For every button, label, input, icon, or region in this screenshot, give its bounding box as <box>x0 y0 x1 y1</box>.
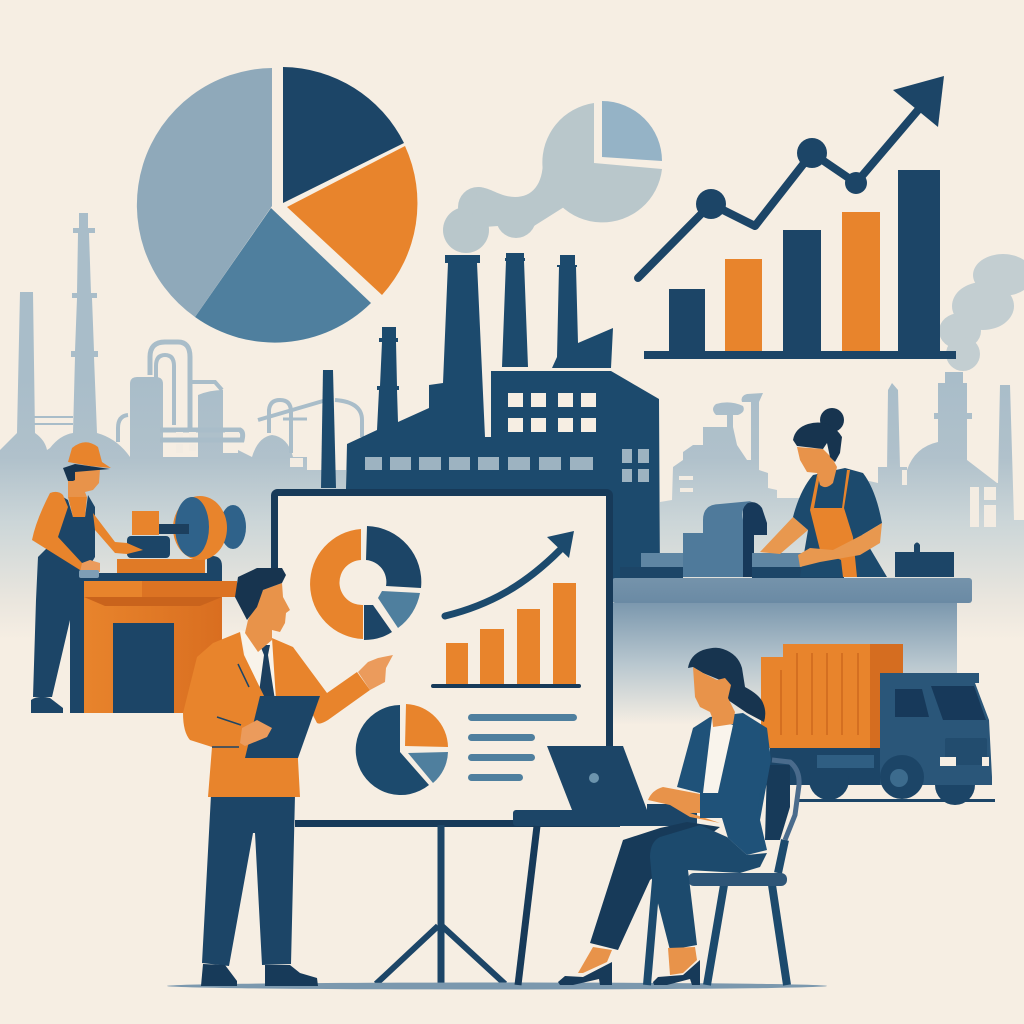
pointing hand <box>358 655 393 690</box>
tablet <box>245 696 320 758</box>
shirt center <box>68 497 87 517</box>
jacket <box>183 632 370 797</box>
holding hand <box>240 720 272 746</box>
face <box>693 667 735 727</box>
head <box>797 447 837 487</box>
presentation board <box>271 492 620 985</box>
left worker <box>31 442 246 713</box>
right arm <box>93 513 143 554</box>
shoes <box>201 964 237 986</box>
small pie chart with smoke <box>443 101 662 253</box>
hair <box>235 568 286 620</box>
right skyline <box>660 372 1024 640</box>
legs and overalls <box>33 492 95 713</box>
laptop <box>547 746 692 810</box>
torso <box>793 468 887 577</box>
smoke <box>443 160 572 253</box>
trousers <box>202 795 295 966</box>
main slice <box>542 103 662 222</box>
board stand <box>376 825 505 985</box>
bar and line chart <box>638 76 956 359</box>
desk <box>513 810 697 985</box>
jacket seams <box>212 664 249 747</box>
head <box>68 469 100 497</box>
left arm <box>32 492 82 570</box>
left arm <box>760 517 808 554</box>
donut chart <box>310 526 421 640</box>
floor shadow <box>167 982 827 990</box>
right smoke <box>939 254 1024 371</box>
shoes <box>578 947 612 973</box>
trend line <box>638 76 944 278</box>
board text lines <box>468 714 577 781</box>
cargo ribs <box>781 653 858 735</box>
shirt <box>703 718 733 793</box>
truck <box>761 644 995 805</box>
chair <box>647 760 799 985</box>
front leg <box>650 825 767 950</box>
counter <box>612 578 972 725</box>
hands <box>648 787 720 823</box>
board small pie <box>356 704 448 795</box>
apron <box>810 470 857 577</box>
blazer sleeve <box>700 793 760 818</box>
light slice <box>602 101 662 161</box>
bench <box>69 581 237 713</box>
factory light windows <box>365 449 649 482</box>
face <box>245 583 290 652</box>
board bars <box>431 583 581 688</box>
board trend arrow <box>445 531 574 616</box>
back leg <box>590 822 720 950</box>
presenter <box>183 568 393 986</box>
right worker <box>620 408 954 578</box>
tie <box>258 645 275 700</box>
machine <box>620 501 954 578</box>
machine <box>69 496 246 581</box>
left skyline <box>0 213 362 640</box>
factory windows <box>508 393 596 432</box>
blazer <box>677 713 771 855</box>
shirt <box>240 630 278 700</box>
left skyline pipes <box>34 342 362 453</box>
hair <box>688 648 765 722</box>
right arm <box>798 523 882 567</box>
big pie chart <box>137 67 417 343</box>
left skyline window gaps <box>176 432 303 467</box>
factory <box>321 253 660 580</box>
right skyline window gaps <box>679 470 996 527</box>
seated woman <box>513 648 799 985</box>
